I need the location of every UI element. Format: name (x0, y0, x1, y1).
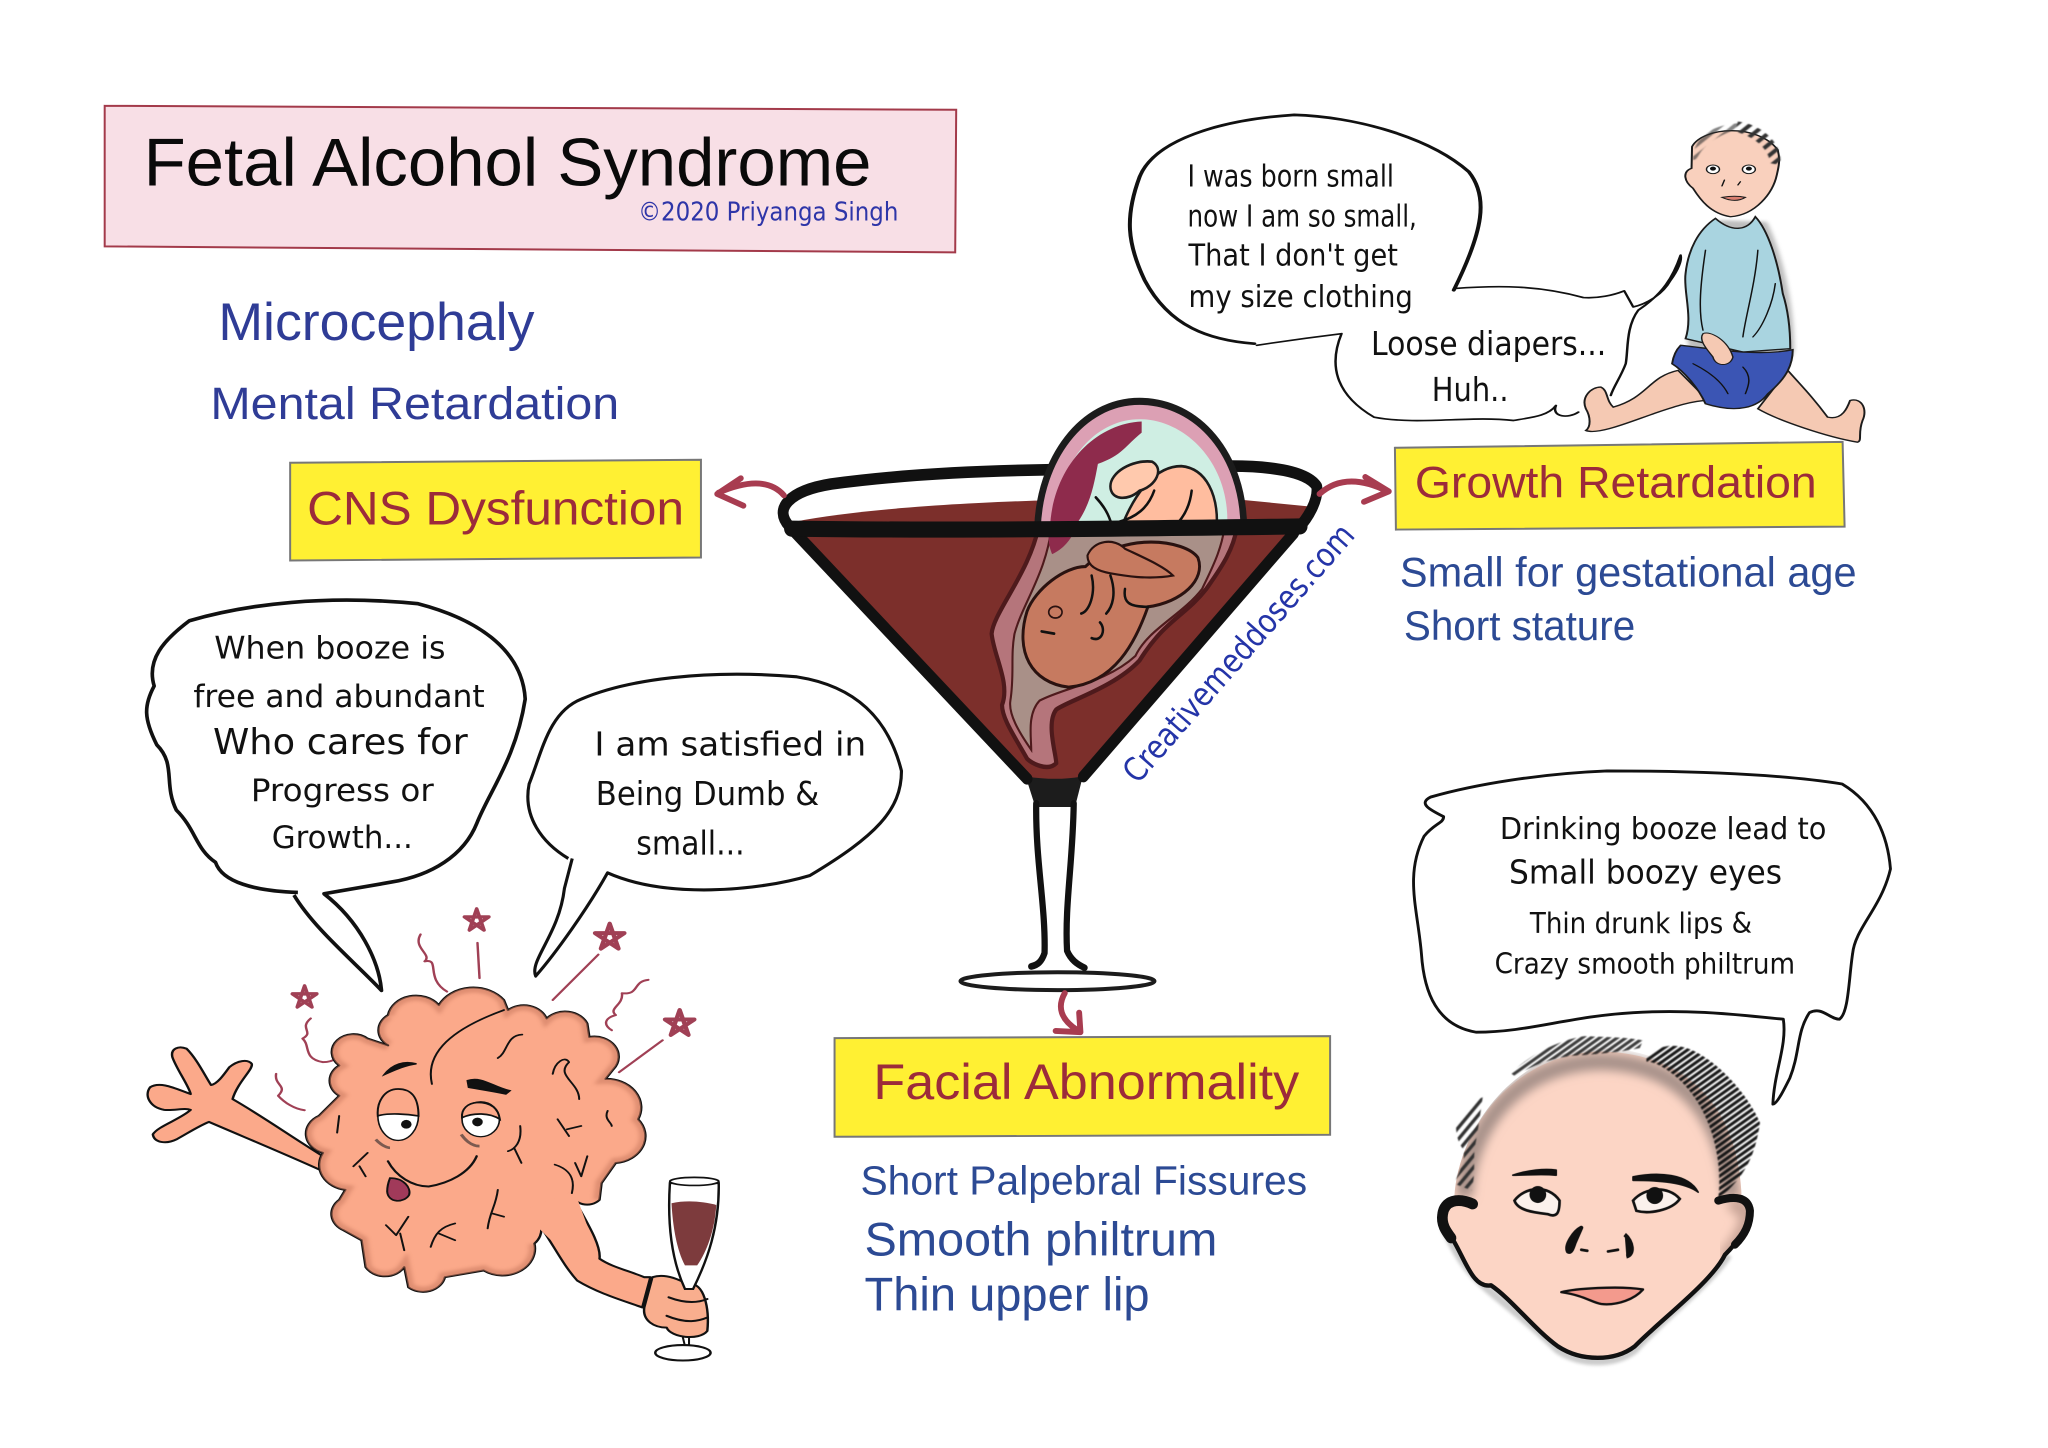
wine surface line (792, 526, 1300, 530)
arrow: to CNS (717, 478, 784, 506)
left arm and hand (148, 1047, 327, 1173)
dizzy stars and squiggles (276, 909, 694, 1110)
baby diaper (1672, 345, 1793, 409)
Creativemeddoses watermark: Creativemeddoses.com (1114, 516, 1362, 790)
shadow (1687, 220, 1794, 405)
speech bubble: boozy eyes: Thin drunk lips & (1529, 906, 1752, 940)
baby figure (1585, 122, 1864, 442)
baby legs (1585, 370, 1864, 442)
speech bubble: booze free: Progress or (251, 773, 434, 809)
baby shirt (1685, 217, 1790, 352)
eyes (1514, 1189, 1560, 1215)
nose (1567, 1228, 1632, 1257)
bubble text: born small: my size clothing (1189, 280, 1413, 315)
lower uterus in wine (992, 522, 1238, 767)
uterus and fetus (792, 401, 1300, 767)
Facial Abnormality label: Facial Abnormality (873, 1054, 1299, 1110)
Growth Retardation label: Growth Retardation (1415, 457, 1817, 508)
speech bubble: booze free: When booze is (214, 631, 446, 667)
CNS symptoms text: Microcephaly (218, 293, 535, 352)
bubble text: born small: Huh.. (1432, 370, 1509, 409)
baby head (1685, 131, 1779, 217)
speech bubble: boozy eyes: Crazy smooth philtrum (1495, 946, 1795, 980)
ears (1442, 1201, 1473, 1238)
arrow: to growth (1320, 477, 1389, 502)
soft shadow (1444, 1228, 1728, 1361)
speech bubble: satisfied: small... (636, 825, 745, 863)
brain body (306, 988, 645, 1292)
bubble text: born small: now I am so small, (1188, 199, 1417, 234)
speech bubble: boozy eyes: Small boozy eyes (1509, 853, 1782, 891)
wine bowl (794, 500, 1308, 779)
speech bubble: satisfied (528, 674, 901, 976)
arrows (717, 477, 1389, 1032)
growth symptoms text: Short stature (1404, 602, 1635, 649)
title: Fetal Alcohol Syndrome (144, 126, 871, 201)
CNS Dysfunction label: CNS Dysfunction (307, 483, 684, 535)
face shape (1441, 1051, 1749, 1358)
title banner (105, 106, 956, 252)
bubble text: born small: Loose diapers... (1371, 324, 1606, 363)
smile and tongue (388, 1156, 477, 1186)
bubble text: born small: That I don't get (1188, 238, 1398, 273)
speech bubble: booze free: Who cares for (213, 722, 468, 763)
hair (1454, 1036, 1760, 1199)
glass rim and sides (783, 466, 1317, 529)
brain edge shading (306, 988, 645, 1292)
facial symptoms text (860, 1158, 1307, 1320)
CNS symptoms text: Mental Retardation (210, 377, 619, 429)
small wine glass and fist (644, 1177, 719, 1361)
CNS symptoms text (210, 293, 619, 429)
Growth Retardation label (1395, 442, 1845, 530)
speech bubble: booze free: Growth... (272, 820, 413, 856)
mouth (1561, 1288, 1643, 1304)
speech bubble: satisfied: Being Dumb & (596, 775, 819, 813)
arrow: to facial (1056, 993, 1080, 1032)
martini glass with fetus (783, 401, 1317, 990)
baby hand (1702, 333, 1733, 365)
baby face (1441, 1036, 1760, 1361)
copyright: ©2020 Priyanga Singh (638, 197, 898, 227)
speech bubble: born small (1130, 115, 1681, 421)
glass stem (960, 774, 1155, 990)
bubble text: born small: I was born small (1188, 160, 1394, 195)
facial symptoms text: Thin upper lip (864, 1268, 1150, 1320)
speech bubble: booze free: free and abundant (193, 679, 485, 715)
growth symptoms text: Small for gestational age (1400, 548, 1857, 595)
speech bubble: boozy eyes: Drinking booze lead to (1500, 812, 1826, 847)
CNS Dysfunction label (290, 460, 701, 560)
brain wrinkles (337, 1010, 612, 1250)
under-eye bags (376, 1134, 480, 1148)
growth symptoms text (1400, 548, 1857, 649)
right arm (528, 1193, 650, 1307)
bubble text: born small (1188, 160, 1606, 409)
drunk brain character (148, 909, 719, 1361)
upper uterus above wine (1037, 401, 1244, 535)
eyes (378, 1090, 418, 1140)
speech bubble: satisfied: I am satisfied in (594, 725, 866, 763)
eyebrows (384, 1063, 510, 1094)
speech bubble: booze free (147, 600, 525, 990)
eyebrows (1513, 1169, 1698, 1192)
arm junction patch (525, 1190, 596, 1267)
Facial Abnormality label (835, 1036, 1330, 1137)
facial symptoms text: Smooth philtrum (864, 1213, 1217, 1265)
baby hair (1693, 122, 1780, 165)
facial symptoms text: Short Palpebral Fissures (860, 1158, 1307, 1204)
speech bubble: boozy eyes (1414, 771, 1890, 1104)
